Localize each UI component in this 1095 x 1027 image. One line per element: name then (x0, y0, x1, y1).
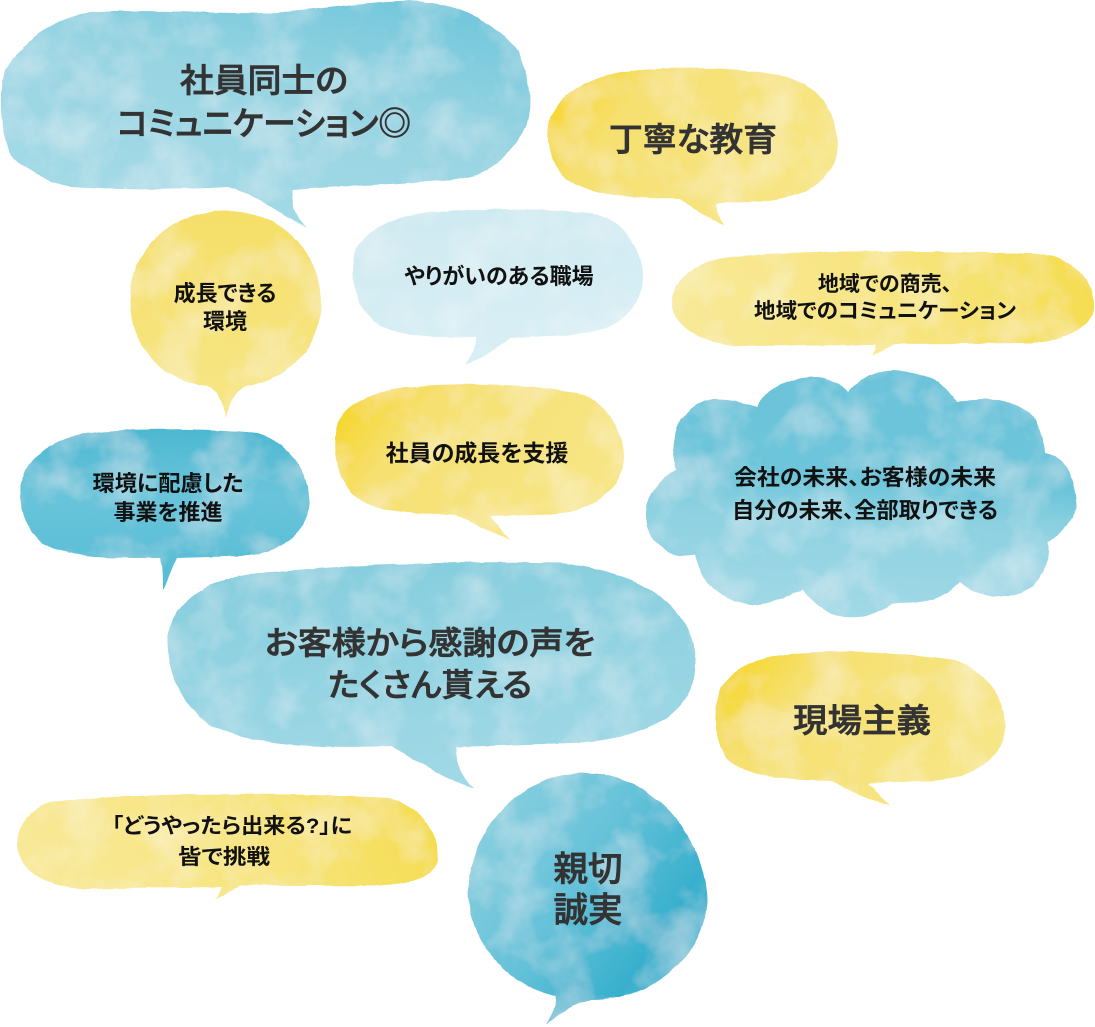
text: bubble label: 事業を推進 (113, 500, 223, 525)
text: bubble label (754, 273, 1016, 323)
bubble: 親切誠実 (468, 773, 707, 1025)
bubble: 地域での商売、地域でのコミュニケーション (672, 251, 1094, 356)
bubble: 丁寧な教育 (548, 68, 838, 225)
text: bubble label: 皆で挑戦 (178, 846, 270, 869)
text: bubble heading: お客様から感謝の声を (265, 625, 595, 661)
text: bubble label: 会社の未来、お客様の未来 (734, 465, 996, 490)
bubble: お客様から感謝の声をたくさん貰える (167, 562, 696, 788)
bubble: cloud 会社の未来、お客様の未来 (646, 370, 1077, 617)
text: bubble label: 地域でのコミュニケーション (754, 300, 1016, 323)
text: bubble heading (265, 625, 595, 703)
text: bubble label (112, 815, 352, 869)
text: bubble label: 社員の成長を支援 (386, 440, 568, 466)
text: bubble label: 「どうやったら出来る?」に (112, 815, 352, 838)
text: bubble label (174, 281, 276, 334)
bubble: 現場主義 (715, 652, 1005, 806)
bubble: やりがいのある職場 (353, 209, 643, 364)
bubble: 社員同士のコミュニケーション◎ (1, 1, 530, 227)
bubble: 社員の成長を支援 (335, 384, 624, 539)
text: bubble label: やりがいのある職場 (404, 264, 594, 289)
text: bubble label (92, 471, 244, 525)
text: bubble heading (554, 851, 622, 930)
text: bubble label: 地域での商売、 (818, 273, 952, 296)
text: bubble heading: コミュニケーション◎ (117, 105, 411, 142)
bubble: 環境に配慮した事業を推進 (20, 429, 310, 591)
bubble: 成長できる環境 (130, 211, 321, 418)
bubble: 「どうやったら出来る?」に皆で挑戦 (17, 794, 438, 899)
text: bubble label: 丁寧な教育 (609, 121, 777, 158)
text: bubble label (732, 465, 998, 523)
text: bubble heading: たくさん貰える (328, 667, 532, 703)
text: bubble heading: 親切 (554, 851, 622, 889)
text: bubble heading: 誠実 (554, 892, 622, 930)
text: bubble label: 成長できる (174, 281, 276, 306)
text: bubble heading: 社員同士の (180, 62, 348, 99)
text: bubble label: 自分の未来、全部取りできる (732, 498, 998, 523)
text: bubble label: 環境に配慮した (92, 471, 244, 496)
text: bubble label: 環境 (203, 309, 247, 334)
text: bubble heading (117, 62, 411, 142)
text: bubble label: 現場主義 (793, 702, 931, 739)
